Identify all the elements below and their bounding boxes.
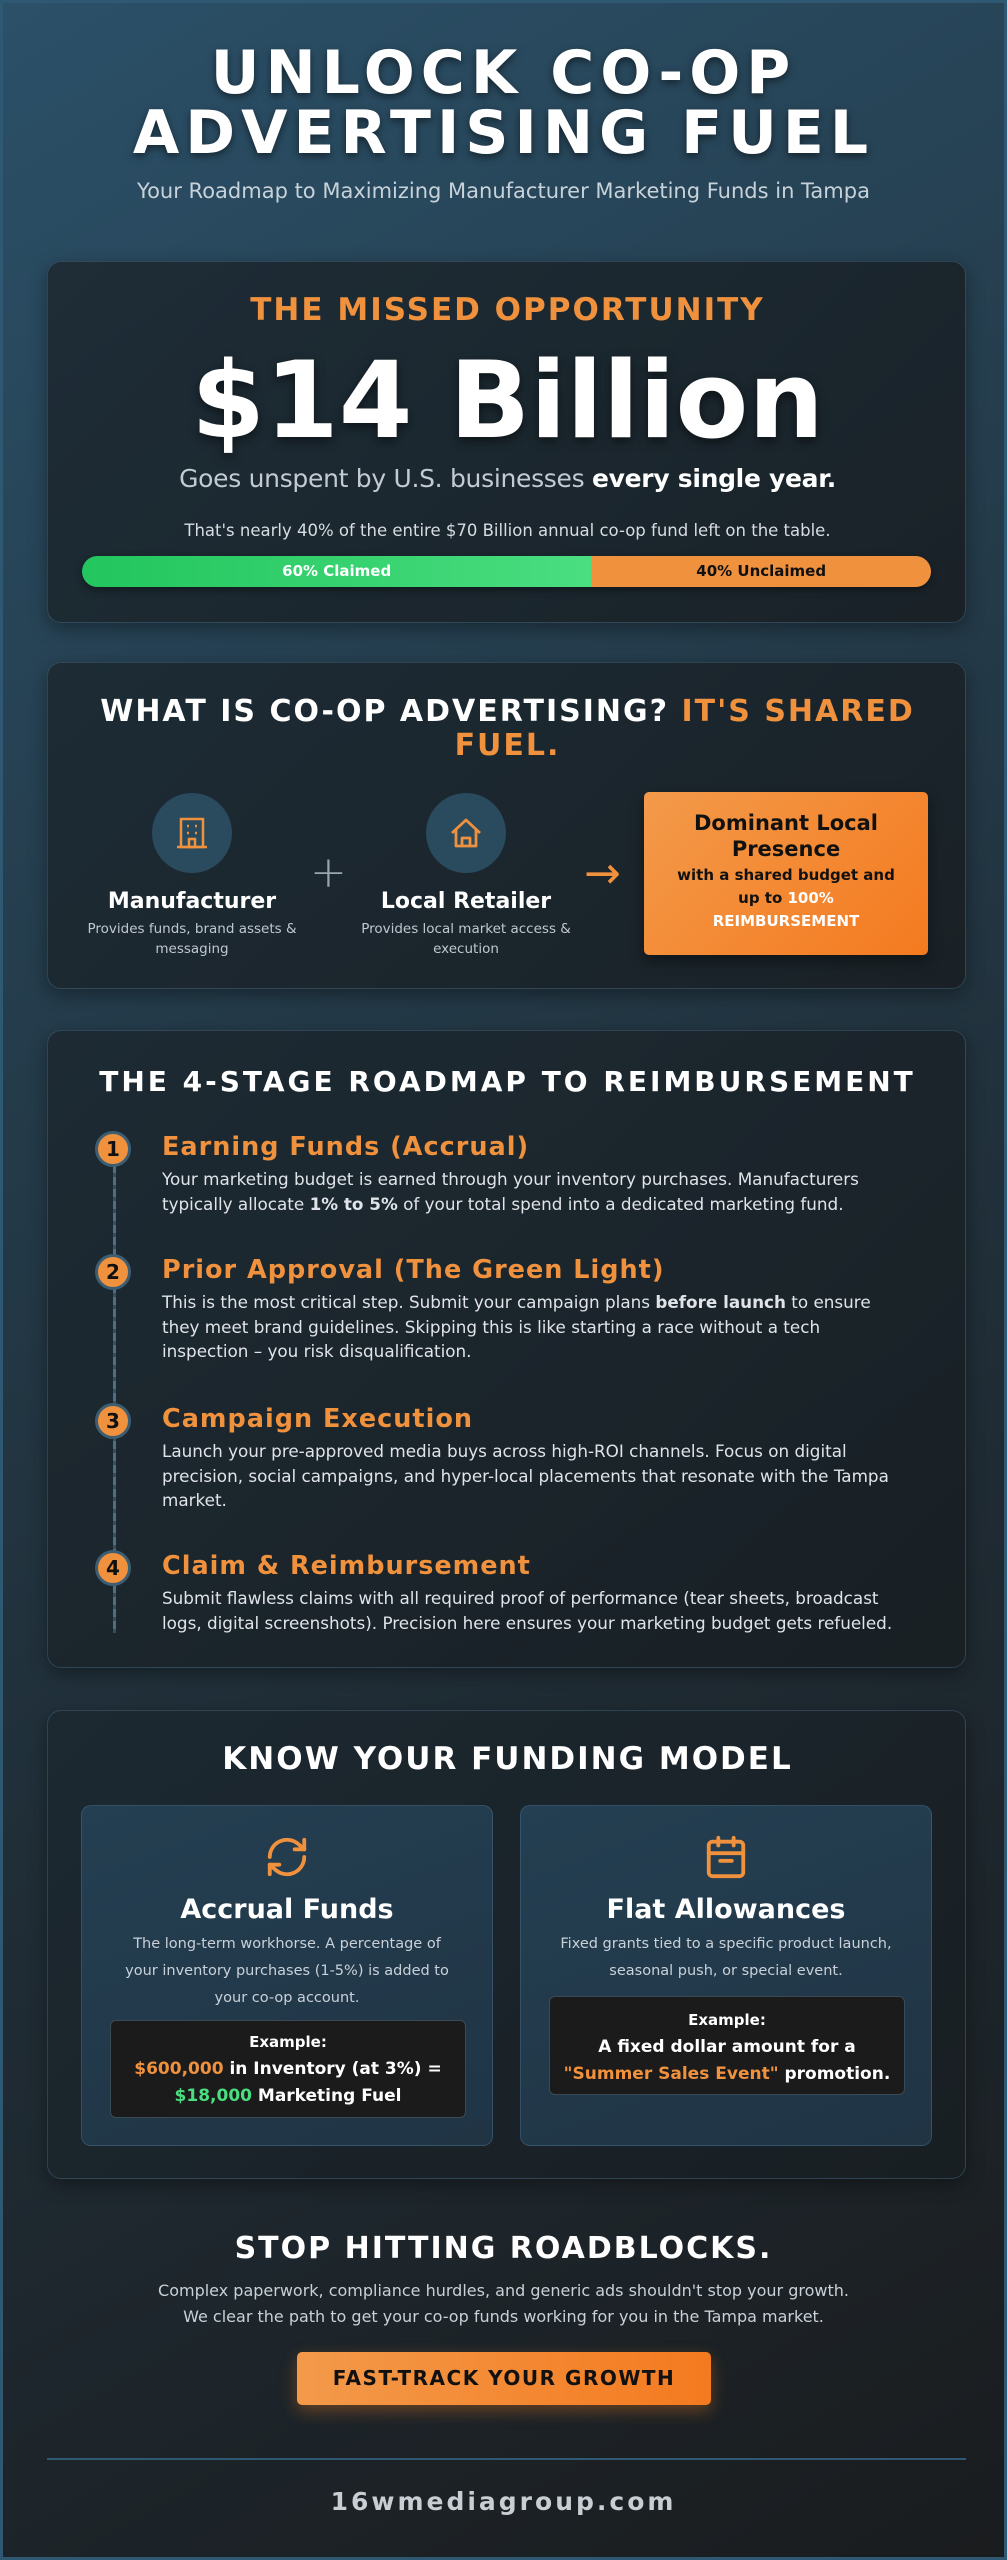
card: accrual funds: Accrual Funds [180,1894,394,1925]
bar: claimed: 60% Claimed [282,562,391,580]
step 3: Campaign Execution [162,1404,473,1434]
local retailer: Local Retailer [381,889,551,914]
example box: $18,000 Marketing Fuel [175,2086,401,2106]
heading: THE 4-STAGE ROADMAP TO REIMBURSEMENT [99,1065,916,1098]
panel: roadmap: 4 [106,1556,120,1580]
arrow: → [584,848,621,899]
icon: house [426,793,506,873]
step 4: Submit flawless claims with all required proof of performance (tear sheets, broadcast logs, digital screenshots). Precision here ensures your marketing budget gets refueled. [162,1588,892,1632]
timeline line [113,1153,116,1633]
example box: Example: [688,2011,766,2029]
icon: plus: + [310,847,347,898]
step 3 [95,1403,889,1510]
divider [47,2458,966,2460]
manufacturer [87,793,296,957]
panel: roadmap: 2 [106,1260,120,1284]
title: ADVERTISING FUEL [133,98,874,168]
step 2 [95,1254,871,1361]
panel: missed opportunity [47,261,966,623]
statement: Goes unspent by U.S. businesses every single year. [179,464,836,493]
card: flat allowances: Flat Allowances [607,1894,845,1925]
step 1: Earning Funds (Accrual) [162,1132,529,1162]
local retailer: Provides local market access & execution [361,921,571,957]
result box: Presence [732,837,840,861]
title [132,38,874,168]
card: flat allowances [520,1805,932,2146]
step 1 [95,1131,859,1214]
CTA text: Complex paperwork, compliance hurdles, and generic ads shouldn't stop your growth. [158,2281,849,2300]
panel: roadmap: 1 [106,1137,120,1161]
card: accrual funds [81,1805,493,2146]
big number: $14 Billion [191,339,824,462]
panel: funding model [47,1710,966,2179]
CTA text: We clear the path to get your co-op funds working for you in the Tampa market. [183,2307,824,2326]
manufacturer: Provides funds, brand assets & messaging [87,921,296,957]
progress bar [82,556,931,587]
card: accrual funds: The long-term workhorse. A percentage of your inventory purchases (1-5%) is added to your co-op account. [125,1936,449,2006]
icon: refresh [268,1838,306,1876]
panel: roadmap: 3 [106,1409,120,1433]
example box: Example: [249,2033,327,2051]
icon: calendar [706,1836,746,1878]
CTA button: FAST-TRACK YOUR GROWTH [333,2366,675,2390]
heading: WHAT IS CO-OP ADVERTISING? IT'S SHARED FUEL. [100,694,915,763]
step 2: Prior Approval (The Green Light) [162,1255,665,1285]
example box: $600,000 in Inventory (at 3%) = [134,2059,442,2079]
footer: 16wmediagroup.com [331,2487,676,2516]
example box [549,1996,905,2095]
heading: the missed opportunity: THE MISSED OPPORTUNITY [250,292,765,328]
local retailer [361,793,571,957]
heading: KNOW YOUR FUNDING MODEL [222,1741,793,1777]
step 4: Claim & Reimbursement [162,1551,531,1581]
result box [644,792,928,955]
example box: "Summer Sales Event" promotion. [564,2064,890,2084]
panel: roadmap [47,1030,966,1668]
CTA button [297,2352,711,2405]
result box: REIMBURSEMENT [713,912,859,930]
manufacturer: Manufacturer [108,889,276,914]
card: flat allowances: Fixed grants tied to a specific product launch, seasonal push, or special event. [560,1936,892,1979]
result box: Dominant Local [694,811,878,835]
title: UNLOCK CO-OP [211,38,796,108]
step 3: Launch your pre-approved media buys across high-ROI channels. Focus on digital precision, social campaigns, and hyper-local placements that resonate with the Tampa market. [162,1441,889,1510]
result box: with a shared budget and [677,866,895,884]
CTA heading: STOP HITTING ROADBLOCKS. [235,2231,772,2266]
bar: unclaimed: 40% Unclaimed [696,562,826,580]
example box [110,2020,466,2118]
result box: up to 100% [738,889,834,907]
note: That's nearly 40% of the entire $70 Billion annual co-op fund left on the table. [184,521,831,540]
bar: claimed [82,556,591,587]
subtitle: Your Roadmap to Maximizing Manufacturer Marketing Funds in Tampa [137,179,870,203]
panel: what is co-op [47,662,966,989]
CTA text [158,2281,849,2326]
example box: A fixed dollar amount for a [598,2037,856,2057]
step 1: Your marketing budget is earned through your inventory purchases. Manufacturers typically allocate 1% to 5% of your total spend into a dedicated marketing fund. [162,1169,859,1214]
bar: unclaimed [591,556,931,587]
step 2: This is the most critical step. Submit your campaign plans before launch to ensure they meet brand guidelines. Skipping this is like starting a race without a tech inspection – you risk disqualification. [162,1292,871,1361]
step 4 [95,1550,892,1632]
icon: building [152,793,232,873]
